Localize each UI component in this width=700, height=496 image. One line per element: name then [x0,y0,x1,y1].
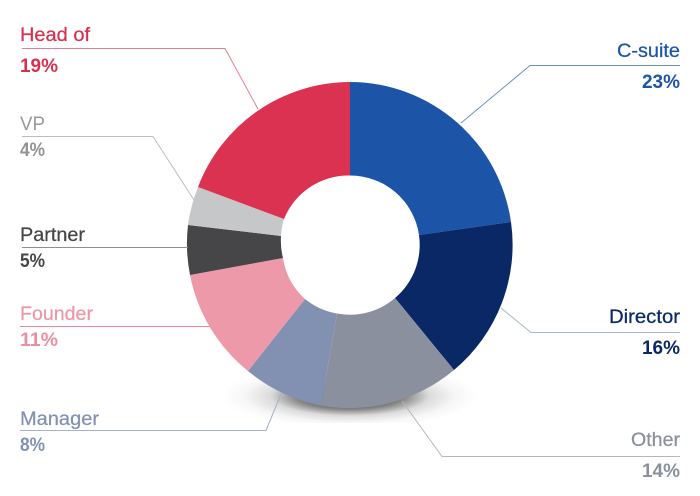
segment: C-suite 23% [350,82,511,235]
label: Head of [20,25,258,109]
segment: Manager 8% [248,299,337,406]
label: Manager: 8% [20,435,45,456]
label: Partner [20,225,188,272]
label: Director: Director [609,307,681,328]
label: Other: Other [631,430,681,451]
segment: Head of 19% [198,82,350,219]
label: Head of: 19% [20,56,58,77]
label: C-suite [461,41,680,123]
label: Director [501,307,681,359]
segment: VP 4% [188,187,284,236]
label: Founder [20,304,210,351]
segment: Partner 5% [187,225,283,275]
label: Other: 14% [642,461,680,482]
donut shadow [244,378,456,422]
label: Head of: Head of [20,25,91,46]
label: C-suite: C-suite [617,41,680,62]
label: C-suite: 23% [642,72,680,93]
label: Other [402,401,681,482]
segment: Director 16% [395,222,513,370]
label: VP: 4% [20,140,45,161]
donut chart [187,82,513,408]
segment: Other 14% [321,298,454,408]
label: Partner: Partner [20,225,86,246]
segment: Founder 11% [190,258,305,371]
label: Founder: 11% [20,330,58,351]
label: Founder: Founder [20,304,94,325]
label: Manager: Manager [20,409,100,430]
label: VP: VP [20,114,45,135]
label: Manager [20,394,281,456]
label: Director: 16% [642,338,680,359]
label: Partner: 5% [20,251,45,272]
label: VP [20,114,194,200]
